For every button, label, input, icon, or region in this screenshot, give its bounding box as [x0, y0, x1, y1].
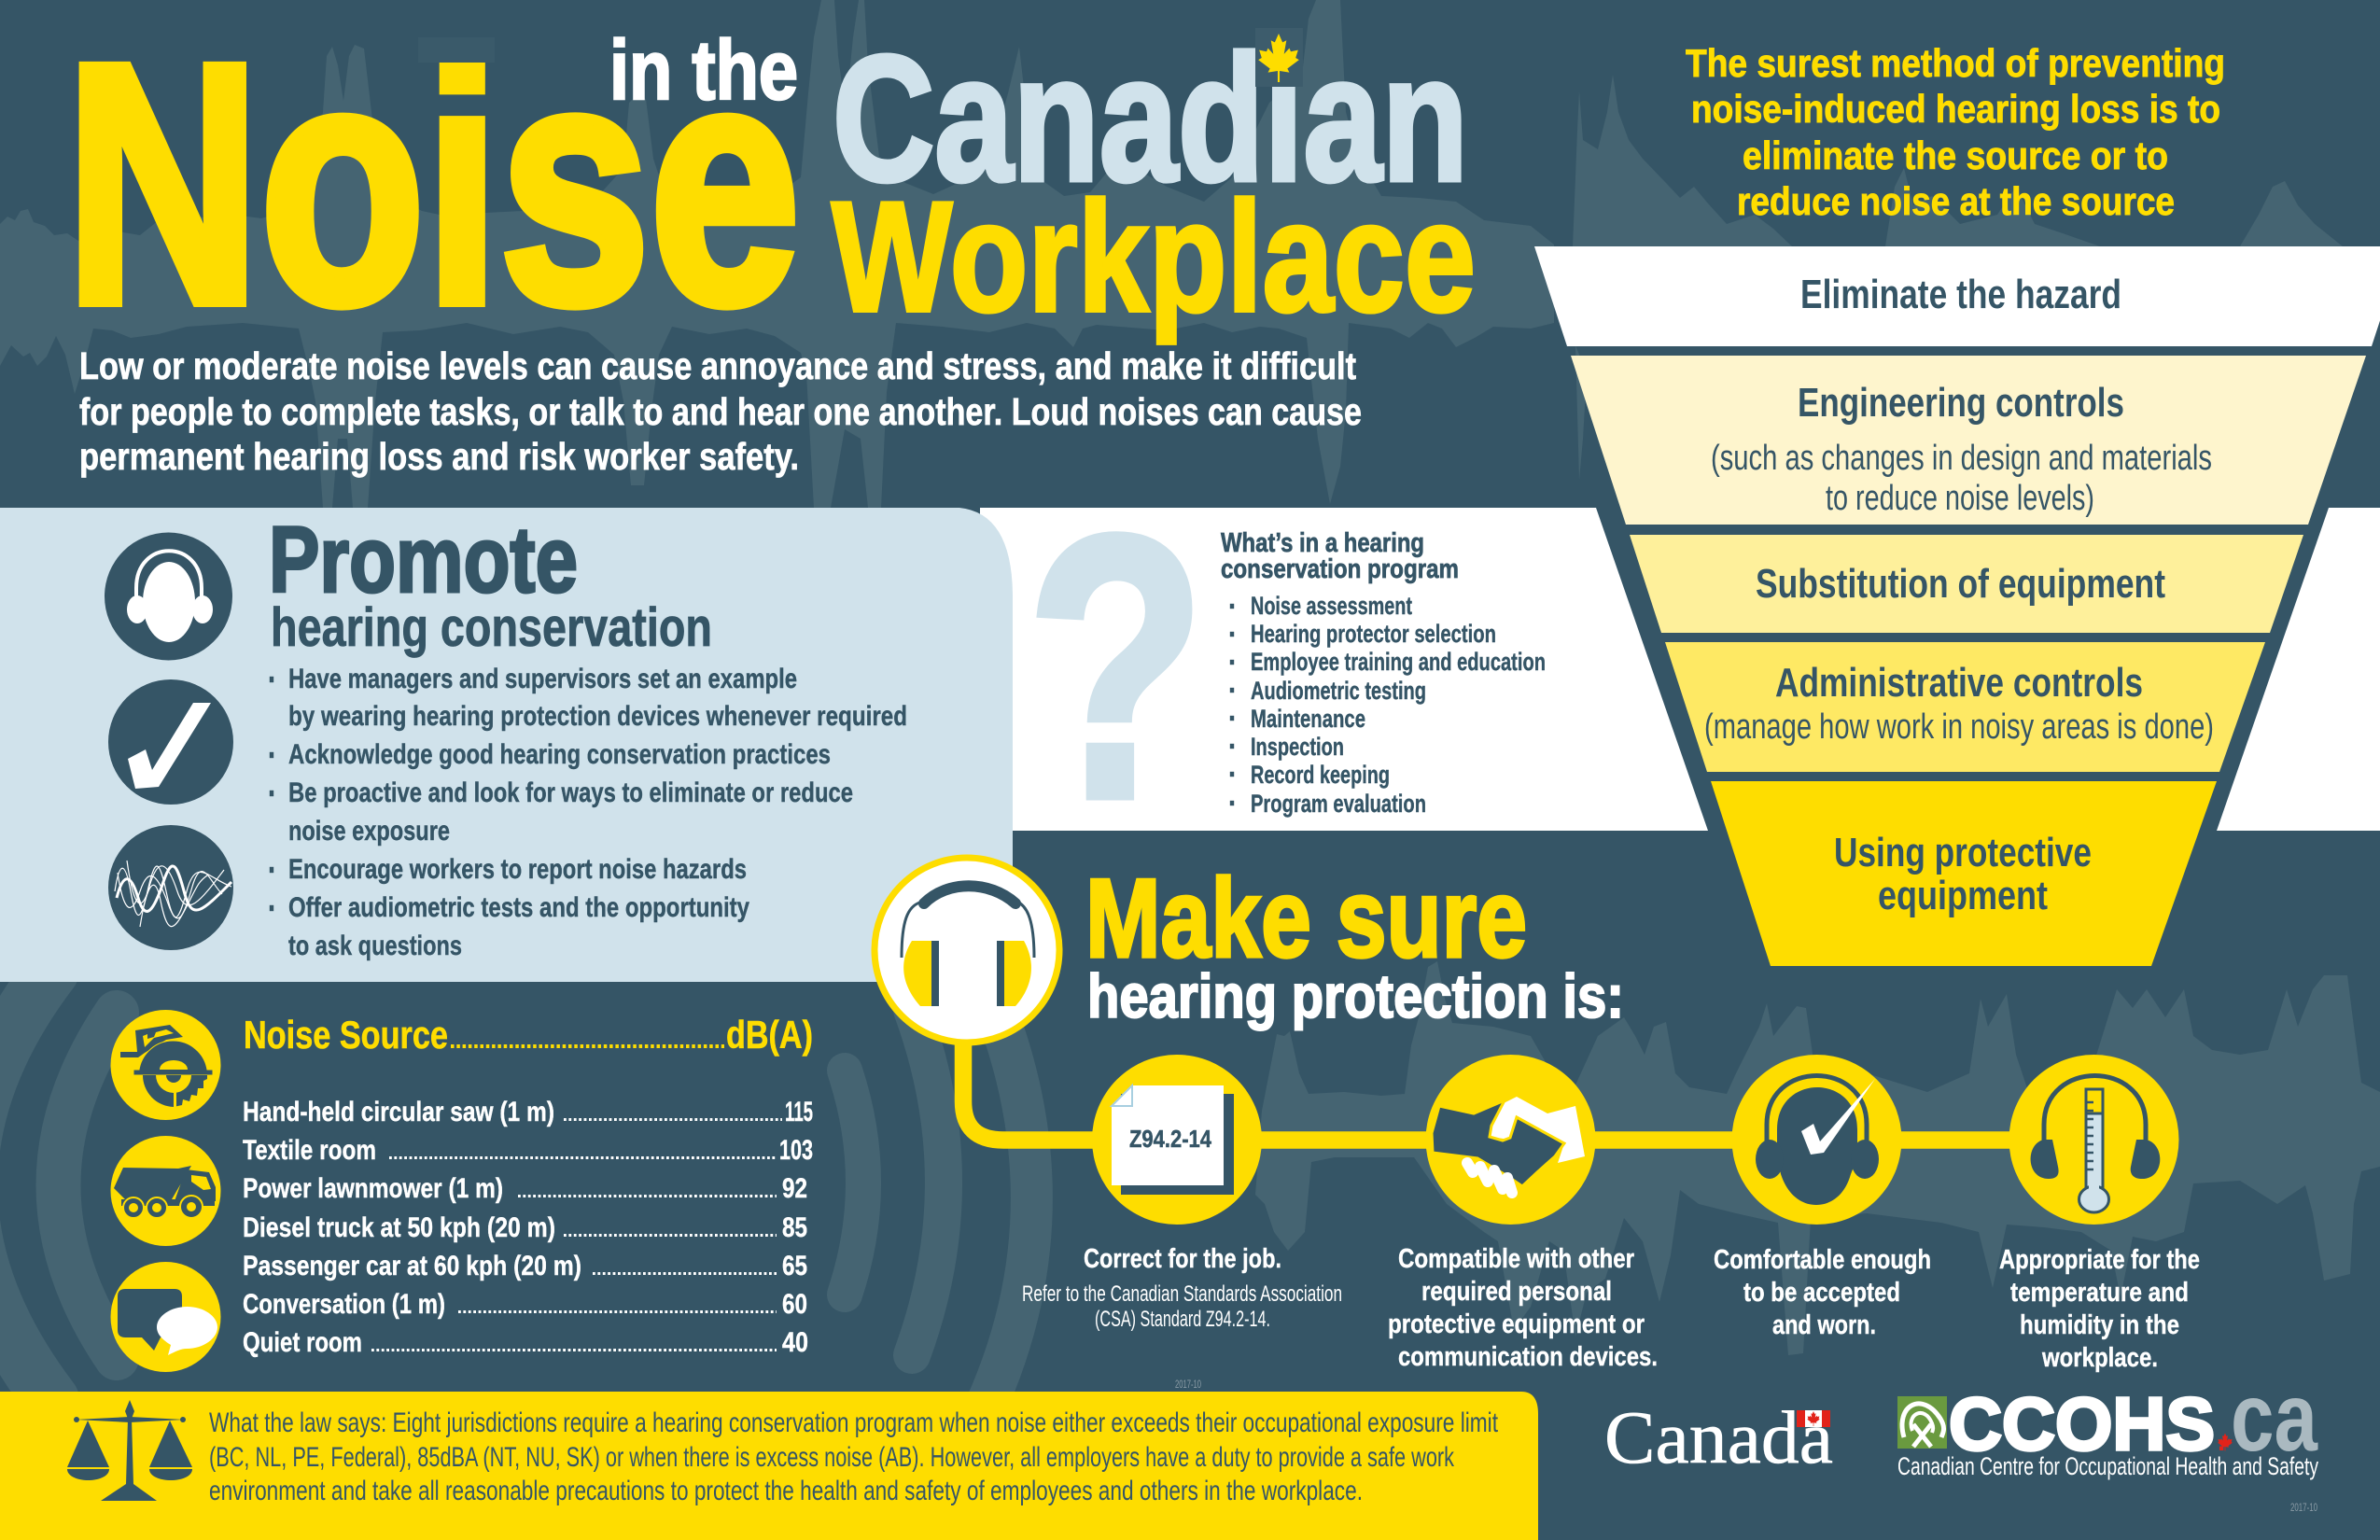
heading: make sure: Make sure	[1085, 856, 1527, 981]
list: promote actions: Encourage workers to report noise hazards	[288, 854, 747, 885]
logo: CCOHS: ca	[2231, 1364, 2318, 1472]
funnel level: substitution	[1630, 535, 2303, 633]
panel: what's in a hearing conservation program: Inspection	[1251, 733, 1344, 761]
date code: 2017-10	[1175, 1378, 1201, 1391]
table header: dB(A)	[726, 1013, 813, 1057]
icon: question mark: ?	[1027, 458, 1206, 875]
table rows: 65	[782, 1251, 807, 1281]
arrow: connector line	[963, 1036, 2072, 1141]
panel: what's in a hearing conservation program: What’s in a hearing	[1221, 528, 1424, 558]
funnel level: eliminate: Eliminate the hazard	[1800, 272, 2121, 317]
funnel level: administrative controls: Administrative controls	[1775, 660, 2143, 706]
table rows: Diesel truck at 50 kph (20 m)	[243, 1212, 555, 1243]
caption: comfortable: to be accepted	[1743, 1278, 1900, 1308]
table rows: 40	[782, 1327, 808, 1358]
caption: appropriate	[1999, 1245, 2200, 1373]
callout: surest method: reduce noise at the source	[1737, 179, 2175, 223]
table header: Noise Source	[244, 1013, 448, 1057]
date code: 2017-10	[2290, 1501, 2317, 1514]
heading: promote: Promote	[269, 508, 578, 612]
logo: CCOHS: CCOHS	[1949, 1382, 2215, 1465]
text: law says	[209, 1407, 1498, 1506]
icon: comfortable head with check	[1732, 1055, 1902, 1225]
title	[65, 0, 1476, 374]
funnel: hierarchy of controls	[1534, 246, 2380, 966]
table rows: Hand-held circular saw (1 m)	[243, 1097, 554, 1127]
caption: compatible	[1388, 1244, 1658, 1372]
logo: Canada wordmark: Canada	[1604, 1397, 1833, 1479]
panel: what's in a hearing conservation program: Noise assessment	[1251, 592, 1412, 620]
table rows: Passenger car at 60 kph (20 m)	[243, 1251, 581, 1281]
table rows: 103	[779, 1135, 813, 1166]
intro text: for people to complete tasks, or talk to and hear one another. Loud noises can cause	[79, 390, 1362, 433]
table rows: Textile room	[243, 1135, 376, 1166]
caption: appropriate: humidity in the	[2020, 1310, 2179, 1340]
logo: CCOHS: .	[2218, 1426, 2225, 1457]
table header	[244, 1013, 813, 1057]
caption: comfortable: Comfortable enough	[1714, 1245, 1931, 1275]
table rows: Conversation (1 m)	[243, 1289, 445, 1320]
table rows: Quiet room	[243, 1327, 362, 1358]
heading: make sure: hearing protection is:	[1087, 961, 1624, 1030]
intro text: permanent hearing loss and risk worker safety.	[79, 435, 799, 478]
funnel level: protective equipment	[1711, 781, 2217, 966]
callout: surest method: The surest method of preventing	[1686, 41, 2225, 85]
logo: CCOHS	[1897, 1364, 2318, 1480]
title: Canadian	[833, 18, 1468, 218]
heading: promote: hearing conservation	[271, 597, 712, 658]
list: promote actions: Offer audiometric tests and the opportunity	[288, 892, 749, 923]
table rows: 92	[782, 1173, 807, 1204]
panel: white band behind hearing conservation program	[980, 508, 2380, 831]
caption: correct for the job: Correct for the job.	[1084, 1244, 1281, 1274]
icon: standard document: Z94.2-14	[1129, 1125, 1211, 1153]
icon: standard document	[1092, 1055, 1262, 1225]
funnel level: eliminate	[1534, 246, 2380, 346]
table rows: Power lawnmower (1 m)	[243, 1173, 503, 1204]
funnel level: engineering controls: to reduce noise levels)	[1826, 479, 2094, 518]
caption: correct for the job: Refer to the Canadian Standards Association	[1022, 1281, 1342, 1307]
panel: promote hearing conservation	[0, 508, 1013, 982]
intro text	[79, 344, 1362, 478]
caption: appropriate: Appropriate for the	[1999, 1245, 2200, 1275]
list: promote actions: Be proactive and look for ways to eliminate or reduce	[288, 777, 853, 808]
heading: promote	[269, 508, 712, 658]
caption: comfortable	[1714, 1245, 1931, 1340]
icon: check mark	[108, 679, 233, 805]
icon: handshake	[1426, 1055, 1596, 1225]
caption: correct for the job: (CSA) Standard Z94.2-14.	[1095, 1307, 1270, 1332]
caption: appropriate: temperature and	[2010, 1278, 2189, 1308]
panel: what the law says	[0, 1392, 1538, 1540]
intro text: Low or moderate noise levels can cause annoyance and stress, and make it difficult	[79, 344, 1356, 387]
funnel level: engineering controls	[1571, 356, 2366, 525]
list: promote actions: to ask questions	[288, 931, 462, 961]
panel: what's in a hearing conservation program: Record keeping	[1251, 761, 1390, 789]
panel: what's in a hearing conservation program: Audiometric testing	[1251, 677, 1426, 705]
icon: saw	[110, 1010, 220, 1120]
funnel level: administrative controls: (manage how work in noisy areas is done)	[1704, 707, 2214, 747]
table rows: 115	[785, 1097, 813, 1127]
callout: surest method: eliminate the source or to	[1743, 133, 2168, 177]
icon: speech bubbles	[110, 1262, 220, 1372]
list: promote actions: by wearing hearing protection devices whenever required	[288, 701, 907, 732]
funnel level: protective equipment: equipment	[1878, 873, 2048, 918]
caption: compatible: protective equipment or	[1388, 1309, 1645, 1339]
table rows: 60	[782, 1289, 807, 1320]
funnel level: protective equipment: Using protective	[1834, 830, 2092, 875]
table rows: 85	[782, 1212, 807, 1243]
caption: correct for the job	[1022, 1244, 1342, 1332]
panel: what's in a hearing conservation program: Maintenance	[1251, 705, 1365, 733]
list: promote actions: Have managers and supervisors set an example	[288, 664, 797, 694]
text: law says: What the law says: Eight jurisdictions require a hearing conservation program when noise either exceeds their occupational exposure limit	[209, 1407, 1498, 1438]
callout: surest method	[1686, 41, 2225, 223]
funnel level: administrative controls	[1665, 642, 2265, 772]
callout: surest method: noise-induced hearing loss is to	[1691, 87, 2220, 131]
funnel level: engineering controls: (such as changes in design and materials	[1711, 439, 2212, 478]
panel: what's in a hearing conservation program	[1221, 528, 1546, 818]
table: noise sources	[243, 1013, 813, 1358]
panel: what's in a hearing conservation program: Program evaluation	[1251, 790, 1426, 818]
list: promote actions: noise exposure	[288, 816, 450, 847]
icon: ear muffs	[875, 858, 1059, 1043]
table rows	[243, 1097, 813, 1358]
title: in the	[609, 24, 798, 118]
text: law says: environment and take all reasonable precautions to protect the health and safety of employees and others in the workplace.	[209, 1476, 1363, 1506]
caption: comfortable: and worn.	[1772, 1310, 1876, 1340]
funnel level: substitution: Substitution of equipment	[1756, 561, 2165, 607]
caption: compatible: required personal	[1421, 1277, 1612, 1307]
icon: scales of justice	[67, 1400, 192, 1501]
list: promote actions	[270, 664, 907, 961]
text: law says: (BC, NL, PE, Federal), 85dBA (NT, NU, SK) or when there is excess noise (AB). However, all employers have a duty to provide a safe work	[209, 1442, 1455, 1473]
icon: thermometer with ear muffs	[2009, 1055, 2178, 1225]
list: promote actions: Acknowledge good hearing conservation practices	[288, 739, 831, 770]
caption: compatible: Compatible with other	[1398, 1244, 1634, 1274]
title: Noise	[65, 0, 800, 374]
icon: truck	[110, 1136, 220, 1246]
panel: what's in a hearing conservation program: Hearing protector selection	[1251, 620, 1496, 648]
funnel level: engineering controls: Engineering controls	[1798, 380, 2124, 426]
caption: appropriate: workplace.	[2041, 1343, 2158, 1373]
panel: what's in a hearing conservation program: conservation program	[1221, 554, 1459, 584]
icon: head with hearing protection	[105, 532, 232, 661]
icon: sound waves	[108, 825, 233, 950]
caption: compatible: communication devices.	[1398, 1342, 1658, 1372]
panel: what's in a hearing conservation program: Employee training and education	[1251, 648, 1546, 676]
title: Workplace	[832, 169, 1476, 344]
